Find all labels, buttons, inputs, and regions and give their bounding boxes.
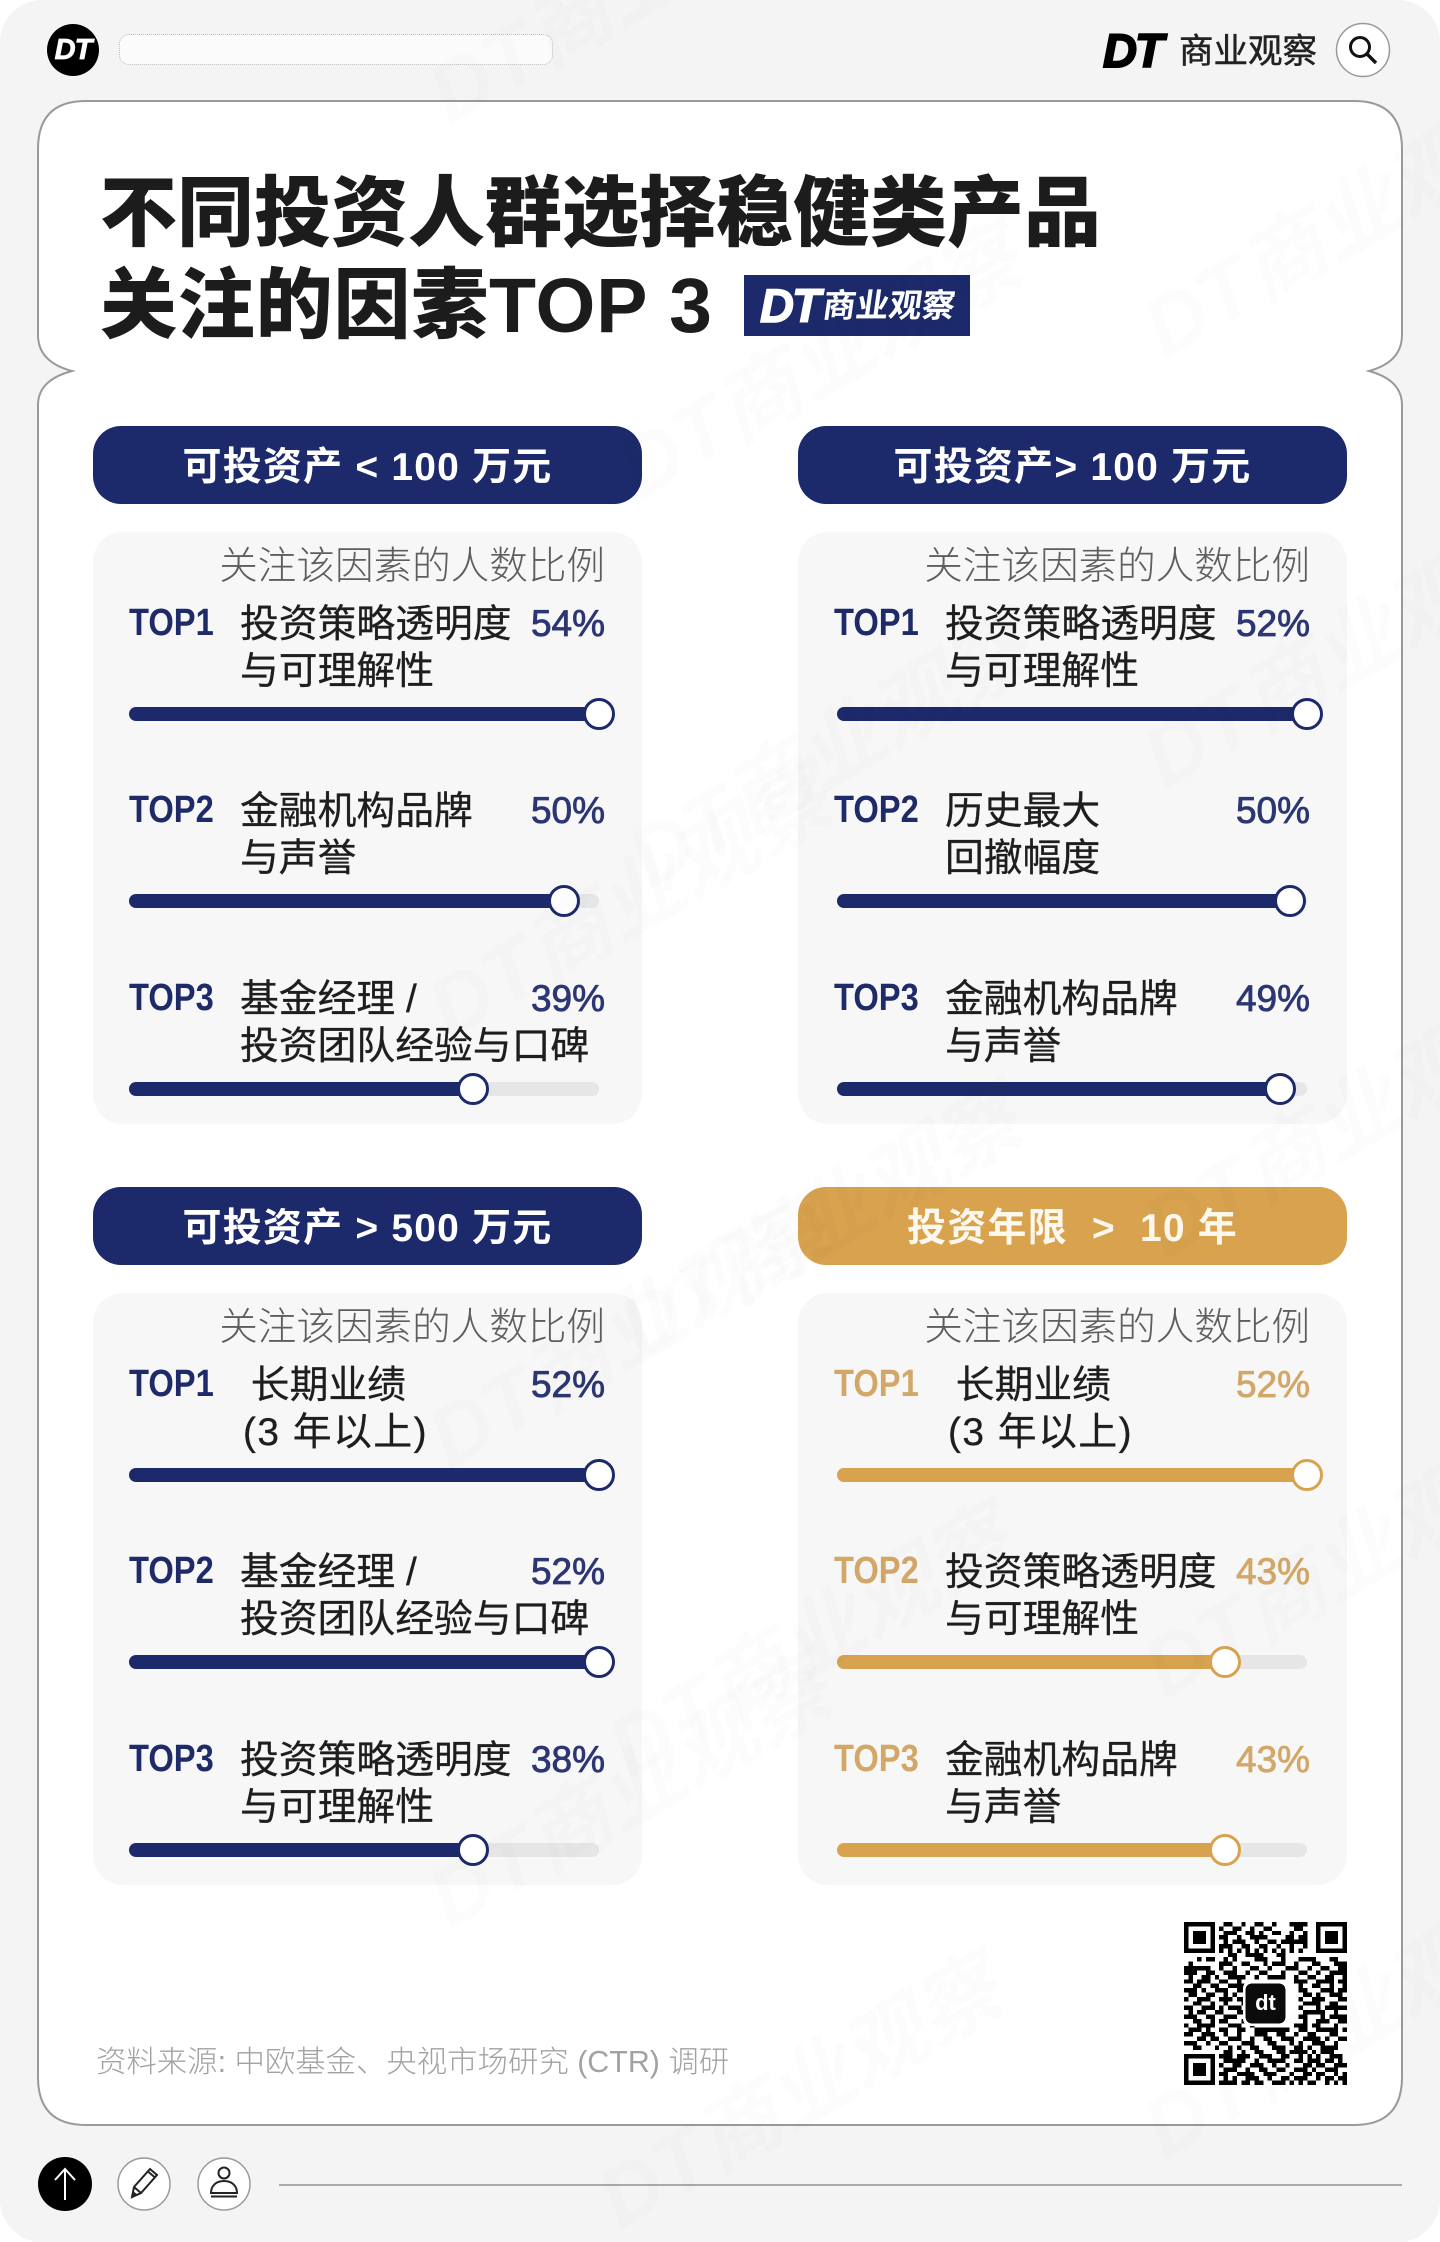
header: 可投资产 > 500 万元: 可投资产 > 500 万元 xyxy=(183,1206,552,1250)
panel: 可投资产 < 100 万元: 39% xyxy=(531,978,605,1019)
panel: 可投资产 > 100 万元: 金融机构品牌 与声誉 xyxy=(945,978,1178,1068)
panel: 可投资产 > 500 万元: TOP1 xyxy=(129,1363,214,1405)
text: DT商业观察 xyxy=(592,1484,1037,1796)
panel: 投资年限 > 10 年: TOP3 xyxy=(834,1738,919,1780)
panel: 投资年限 > 10 年: 金融机构品牌 与声誉 xyxy=(945,1739,1178,1829)
text: DT商业观察 xyxy=(412,744,857,1056)
panel: 可投资产 < 100 万元: 基金经理 / 投资团队经验与口碑 xyxy=(240,978,589,1068)
panel: 投资年限 > 10 年: 43% xyxy=(1236,1551,1310,1592)
panel: 可投资产 < 100 万元: TOP3 xyxy=(129,977,214,1019)
logo badge xyxy=(744,275,970,336)
brand: DT 商业观察: DT xyxy=(1103,24,1162,77)
QR code: dt xyxy=(1255,1990,1277,2015)
panel: 可投资产 > 500 万元: 投资策略透明度 与可理解性 xyxy=(240,1739,512,1829)
icon: search xyxy=(1336,22,1390,78)
header: 可投资产 > 500 万元 xyxy=(93,1187,642,1265)
icon: pencil xyxy=(117,2157,171,2211)
title: 关注的因素TOP 3 xyxy=(100,263,713,349)
panel: 可投资产 > 500 万元: 52% xyxy=(531,1551,605,1592)
text: DT商业观察 xyxy=(412,1634,857,1946)
panel: 可投资产 > 100 万元: TOP1 xyxy=(834,602,919,644)
text: DT商业观察 xyxy=(412,1174,857,1486)
panel: 投资年限 > 10 年 xyxy=(798,1293,1347,1885)
header: 可投资产 < 100 万元: 可投资产 < 100 万元 xyxy=(183,446,552,488)
text: DT商业观察 xyxy=(602,204,1047,516)
icon: DT round logo xyxy=(47,24,99,76)
header: 可投资产 > 100 万元: 可投资产> 100 万元 xyxy=(894,446,1251,488)
icon: DT round logo: DT xyxy=(55,34,91,66)
title xyxy=(100,171,1101,349)
panel: 可投资产 > 500 万元: TOP3 xyxy=(129,1738,214,1780)
panel: 可投资产 > 500 万元: 52% xyxy=(531,1364,605,1405)
panel: 可投资产 > 100 万元: TOP3 xyxy=(834,977,919,1019)
panel: 可投资产 < 100 万元: TOP1 xyxy=(129,602,214,644)
panel: 可投资产 < 100 万元: 54% xyxy=(531,603,605,644)
logo badge: 商业观察 xyxy=(820,287,958,324)
logo badge: DT xyxy=(760,279,819,332)
icon: person xyxy=(197,2157,251,2211)
panel: 可投资产 < 100 万元 xyxy=(93,532,642,1124)
icon: up arrow xyxy=(38,2157,92,2211)
panel: 可投资产 < 100 万元: TOP2 xyxy=(129,789,214,831)
panel: 可投资产 < 100 万元: 关注该因素的人数比例 xyxy=(219,545,605,588)
header: 可投资产 < 100 万元 xyxy=(93,426,642,504)
panel: 可投资产 > 100 万元: 49% xyxy=(1236,978,1310,1019)
panel: 投资年限 > 10 年: 52% xyxy=(1236,1364,1310,1405)
panel: 投资年限 > 10 年: TOP2 xyxy=(834,1550,919,1592)
panel: 可投资产 < 100 万元: 投资策略透明度 与可理解性 xyxy=(240,603,512,693)
header: 投资年限 > 10 年: 投资年限 > 10 年 xyxy=(907,1206,1238,1250)
panel: 可投资产 > 100 万元: 52% xyxy=(1236,603,1310,644)
panel: 可投资产 < 100 万元: 金融机构品牌 与声誉 xyxy=(240,790,473,880)
text: DT商业观察 xyxy=(582,1934,1027,2242)
panel: 投资年限 > 10 年: TOP1 xyxy=(834,1363,919,1405)
panel: 可投资产 > 100 万元: TOP2 xyxy=(834,789,919,831)
panel: 可投资产 > 500 万元: TOP2 xyxy=(129,1550,214,1592)
panel: 可投资产 > 100 万元: 历史最大 回撤幅度 xyxy=(945,790,1100,880)
panel: 可投资产 < 100 万元: 50% xyxy=(531,790,605,831)
text: DT商业观察 xyxy=(612,594,1057,906)
panel: 可投资产 > 100 万元: 关注该因素的人数比例 xyxy=(924,545,1310,588)
panel: 投资年限 > 10 年: 关注该因素的人数比例 xyxy=(924,1306,1310,1349)
panel: 可投资产 > 100 万元 xyxy=(798,532,1347,1124)
divider line xyxy=(279,2184,1402,2186)
panel: 投资年限 > 10 年: 43% xyxy=(1236,1739,1310,1780)
text: DT商业观察 xyxy=(602,1064,1047,1376)
brand: DT 商业观察: 商业观察 xyxy=(1179,33,1317,71)
panel: 可投资产 > 500 万元: 38% xyxy=(531,1739,605,1780)
panel: 可投资产 > 500 万元: 长期业绩 (3 年以上) xyxy=(243,1364,428,1454)
source note: 资料来源: 中欧基金、央视市场研究 (CTR) 调研 xyxy=(96,2045,729,2079)
title: 不同投资人群选择稳健类产品 xyxy=(100,171,1101,257)
QR code xyxy=(1184,1922,1347,2085)
panel: 可投资产 > 500 万元: 基金经理 / 投资团队经验与口碑 xyxy=(240,1551,589,1641)
panel: 可投资产 > 500 万元 xyxy=(93,1293,642,1885)
brand: DT 商业观察 xyxy=(1102,24,1317,77)
search bar xyxy=(119,34,553,65)
panel: 投资年限 > 10 年: 投资策略透明度 与可理解性 xyxy=(945,1551,1217,1641)
header: 投资年限 > 10 年 xyxy=(798,1187,1347,1265)
panel: 可投资产 > 100 万元: 投资策略透明度 与可理解性 xyxy=(945,603,1217,693)
panel: 投资年限 > 10 年: 长期业绩 (3 年以上) xyxy=(948,1364,1133,1454)
panel: 可投资产 > 100 万元: 50% xyxy=(1236,790,1310,831)
header: 可投资产 > 100 万元 xyxy=(798,426,1347,504)
panel: 可投资产 > 500 万元: 关注该因素的人数比例 xyxy=(219,1306,605,1349)
